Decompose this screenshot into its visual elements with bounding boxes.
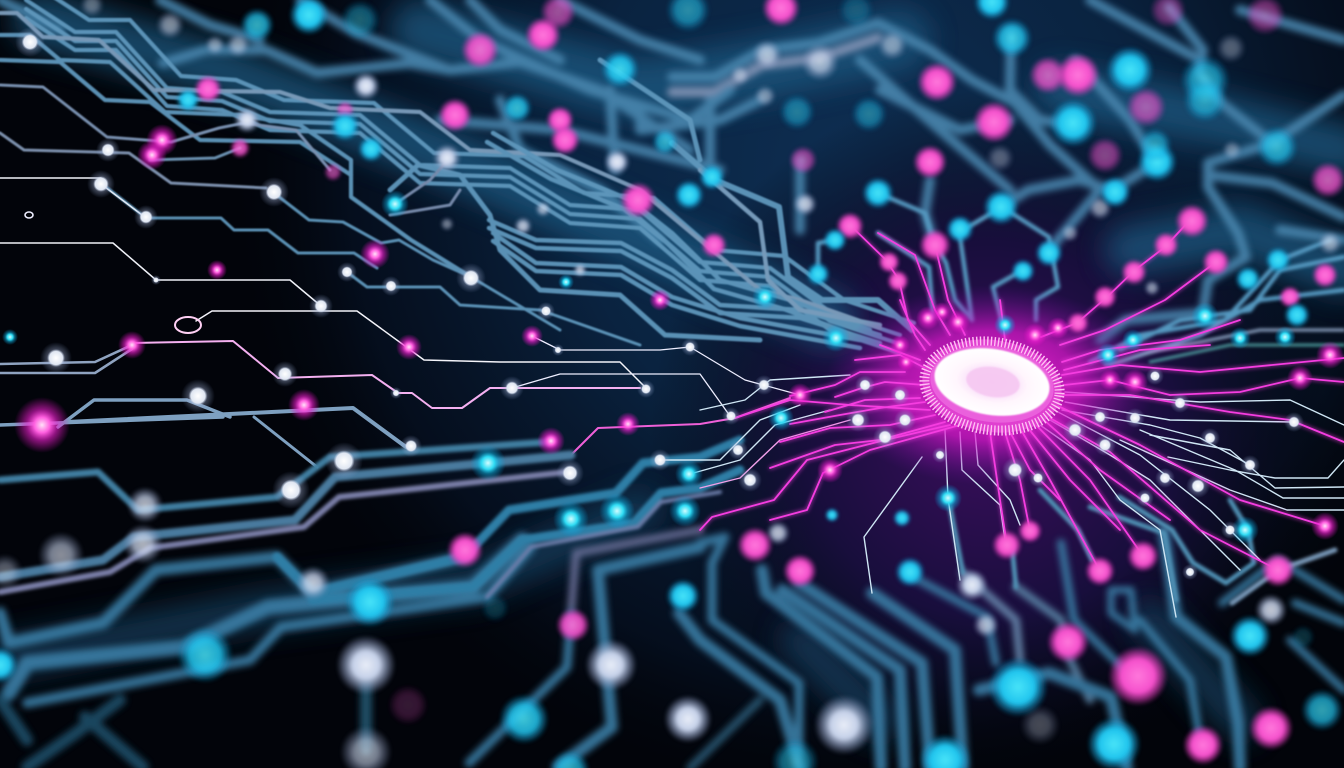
traces: far blurred bands, top bbox=[0, 0, 1344, 340]
traces: magenta lines converging on the chip bbox=[700, 220, 1344, 571]
nodes: near cyan with glow bbox=[2, 190, 1296, 544]
nodes: near magenta with glow bbox=[14, 124, 1344, 540]
nodes: near white pearls bbox=[15, 27, 1304, 580]
traces: right-hand mid blue bands bbox=[950, 490, 1335, 603]
icon: central glowing chip bbox=[916, 331, 1068, 441]
traces: far blurred bands, bottom bbox=[0, 530, 1344, 768]
traces: lower-left blue bundles bbox=[0, 440, 740, 600]
traces: upper fan of blue branches bbox=[818, 193, 1344, 365]
traces: mid blue bundles, top left bbox=[0, 0, 914, 353]
chip halo glow bbox=[825, 285, 1155, 485]
traces: thin lines fanning toward the chip bbox=[660, 375, 1344, 617]
traces: sharp lines in the left centre bbox=[0, 178, 800, 467]
